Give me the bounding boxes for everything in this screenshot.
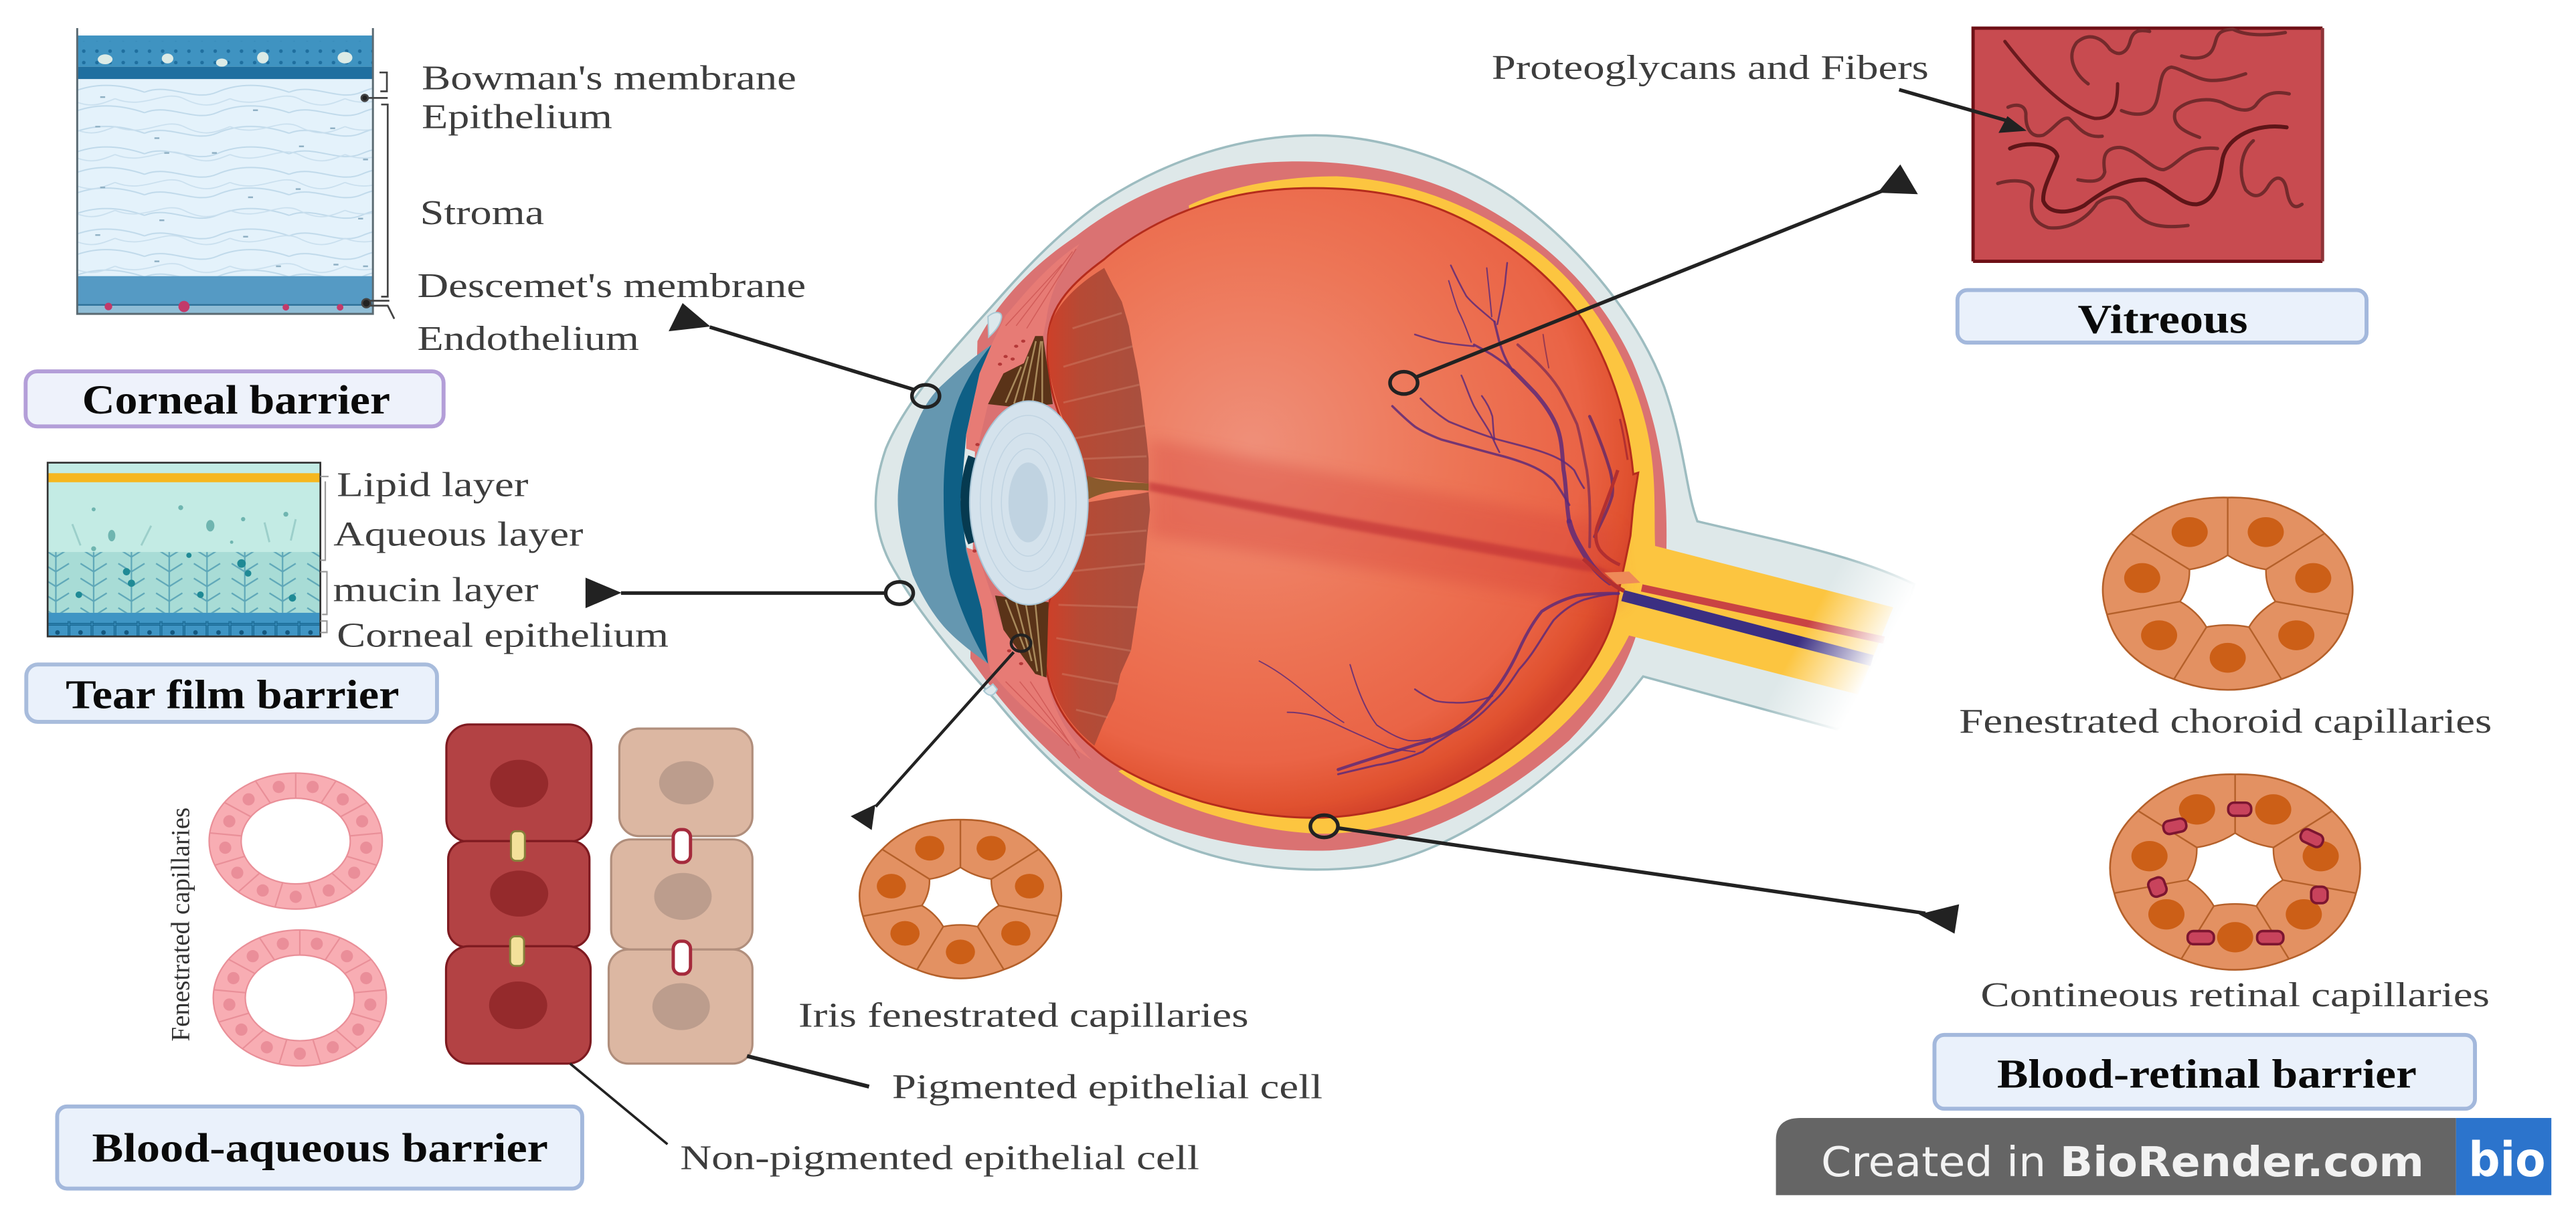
pointer: pigmented cell — [747, 1056, 869, 1087]
icon: fenestrated capillary ring top — [209, 773, 382, 909]
label: Corneal epithelium: Corneal epithelium — [337, 617, 669, 655]
retina yellow layer and optic nerve — [1118, 177, 1893, 834]
footer: BioRender badge: Created in BioRender.com — [1821, 1139, 2424, 1186]
vitreous body — [1044, 188, 1638, 818]
arrow: proteoglycans pointer — [1899, 90, 2027, 133]
hyaloid canal — [1148, 482, 1615, 574]
heading: Vitreous: Vitreous — [2077, 296, 2248, 342]
lens — [970, 401, 1088, 605]
hyaloid soft bands — [1148, 438, 1618, 607]
sclera — [875, 135, 1914, 870]
label: Fenestrated choroid capillaries: Fenestrated choroid capillaries — [1959, 702, 2492, 741]
label: Descemet's membrane: Descemet's membrane — [417, 267, 806, 305]
icon: iris fenestrated capillary ring — [859, 820, 1061, 978]
anterior chamber — [898, 345, 992, 664]
ciliary shade — [1045, 268, 1150, 745]
footer: BioRender badge — [1776, 1118, 2551, 1195]
label: Iris fenestrated capillaries: Iris fenestrated capillaries — [798, 996, 1249, 1034]
label: Bowman's membrane: Bowman's membrane — [422, 60, 796, 98]
heading: Tear film barrier: Tear film barrier — [66, 672, 399, 717]
label: Aqueous layer: Aqueous layer — [333, 515, 583, 553]
pointer: non-pigmented cell — [570, 1064, 667, 1144]
label: mucin layer: mucin layer — [333, 571, 538, 610]
panel: vitreous fibers — [1973, 28, 2322, 262]
heading: Blood-aqueous barrier — [57, 1107, 582, 1189]
footer: BioRender badge: bio — [2468, 1132, 2546, 1188]
arrow: iris capillaries — [851, 635, 1031, 830]
diagram: pigmented epithelial cell column — [608, 729, 752, 1064]
fade out of optic nerve — [1725, 523, 2034, 776]
optic nerve vessels — [1623, 588, 1884, 660]
limbus — [984, 312, 1001, 695]
heading: Blood-retinal barrier: Blood-retinal barrier — [1997, 1051, 2417, 1097]
label: Fenestrated capillaries (vertical): Fenestrated capillaries — [166, 808, 195, 1042]
arrow: tear film to mucin — [586, 577, 914, 608]
label: Endothelium: Endothelium — [417, 320, 639, 358]
icon: continuous retinal capillary ring — [2110, 774, 2360, 970]
icon: fenestrated choroid capillary ring — [2103, 498, 2352, 690]
label: Epithelium: Epithelium — [422, 98, 612, 136]
optic disc red vessels — [1583, 419, 1628, 591]
heading: Corneal barrier — [25, 371, 444, 426]
arrow: cornea to corneal barrier — [669, 303, 940, 407]
choroid — [970, 161, 1666, 851]
arrow: vitreous — [1390, 165, 1918, 394]
heading: Blood-aqueous barrier: Blood-aqueous barrier — [92, 1125, 548, 1171]
heading: Vitreous — [1958, 290, 2367, 343]
ciliary muscle — [966, 244, 1080, 452]
brackets: tear film layers — [321, 476, 329, 632]
label: Stroma: Stroma — [420, 194, 544, 232]
panel: tear film barrier diagram — [48, 463, 329, 636]
panel: corneal barrier diagram — [77, 28, 394, 319]
label: Non-pigmented epithelial cell: Non-pigmented epithelial cell — [680, 1139, 1199, 1177]
ciliary body brown — [988, 336, 1053, 678]
label: Proteoglycans and Fibers: Proteoglycans and Fibers — [1492, 49, 1929, 87]
heading: Blood-retinal barrier — [1934, 1035, 2475, 1109]
brackets: cornea layers — [361, 72, 394, 319]
heading: Tear film barrier — [26, 664, 437, 722]
diagram: eye cross-section — [875, 135, 2034, 870]
icon: fenestrated capillary ring bottom — [213, 930, 386, 1066]
arrow: blood-retinal barrier — [1310, 815, 1959, 934]
retinal vessels — [1259, 263, 1618, 774]
heading: Corneal barrier: Corneal barrier — [82, 377, 390, 423]
label: Contineous retinal capillaries: Contineous retinal capillaries — [1980, 976, 2490, 1014]
label: Pigmented epithelial cell: Pigmented epithelial cell — [892, 1068, 1322, 1106]
label: Lipid layer: Lipid layer — [337, 466, 528, 504]
diagram: non-pigmented epithelial cell column — [446, 725, 592, 1064]
